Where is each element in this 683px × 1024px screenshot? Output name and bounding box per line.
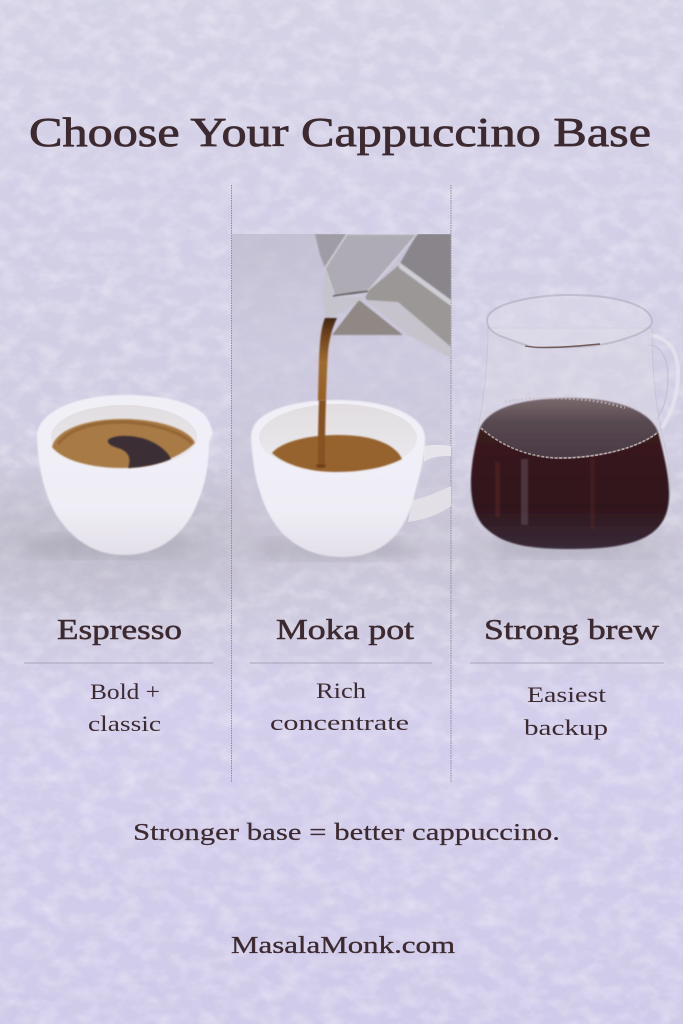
divider rule [470, 662, 664, 664]
liquid [471, 428, 669, 549]
reflections [521, 459, 528, 525]
image: strong brew glass jug [471, 295, 678, 558]
description: Rich [316, 678, 366, 703]
column divider right [450, 185, 452, 782]
jug rim [487, 295, 652, 348]
heading: Espresso: Espresso [57, 615, 182, 646]
column: moka pot label [250, 615, 432, 735]
column divider left [230, 185, 232, 782]
description: classic [88, 711, 161, 736]
moka pot body [315, 234, 451, 358]
liquid surface line [481, 428, 658, 458]
description: concentrate [270, 710, 409, 735]
heading: Moka pot: Moka pot [276, 615, 414, 646]
column: espresso label [24, 615, 213, 736]
description: Bold + [90, 679, 160, 704]
jug handle [650, 335, 678, 428]
jug glass body [471, 328, 670, 549]
description: backup [524, 715, 608, 740]
divider rule [250, 662, 432, 664]
heading: Strong brew: Strong brew [484, 615, 660, 646]
title: Choose Your Cappuccino Base [29, 109, 651, 155]
image: moka cup [250, 400, 451, 560]
image: espresso cup [20, 395, 213, 558]
footer site name: MasalaMonk.com [231, 933, 455, 959]
coffee stream [316, 317, 338, 402]
image: moka pot pouring [314, 234, 451, 402]
column: strong brew label [470, 615, 664, 740]
description: Easiest [527, 682, 606, 707]
divider rule [24, 662, 213, 664]
tagline: Stronger base = better cappuccino. [133, 820, 560, 846]
back liquid [480, 398, 658, 458]
panel: moka pot photo background [232, 234, 451, 600]
